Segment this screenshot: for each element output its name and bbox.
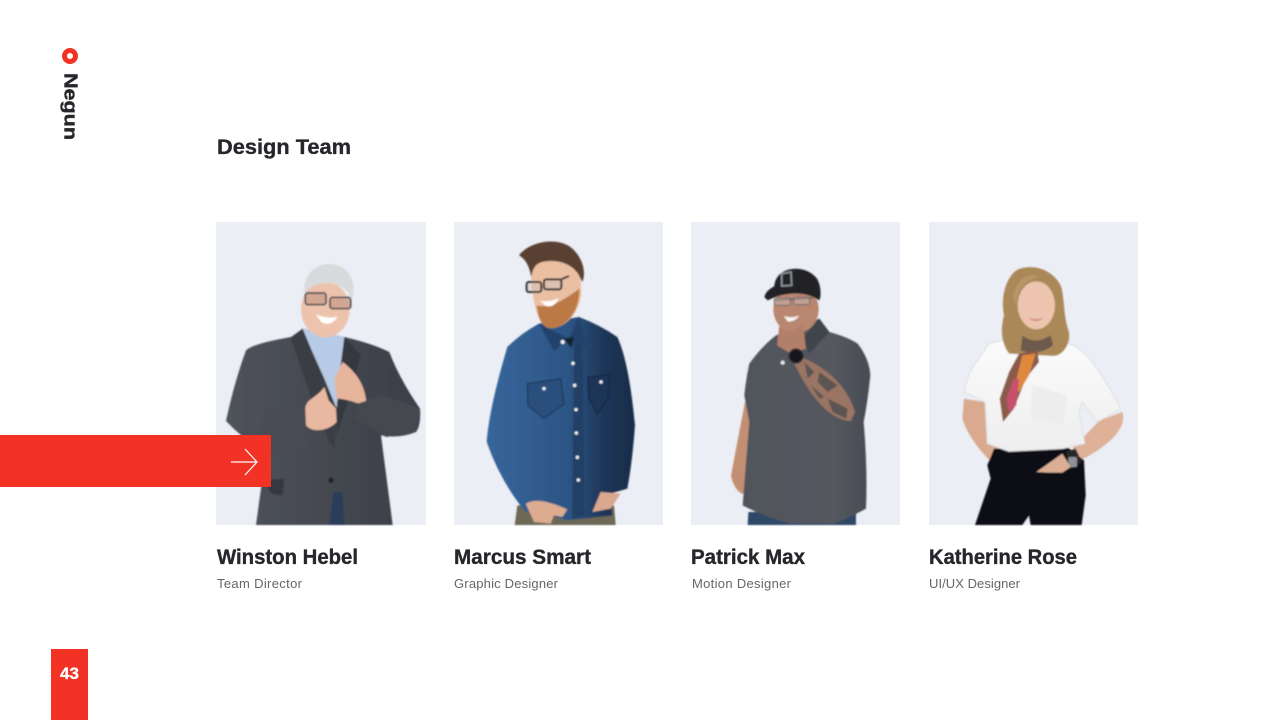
brand logo: Negun [60, 73, 82, 140]
member: Katherine Rose: Katherine Rose [929, 546, 1077, 569]
member: Patrick Max [691, 546, 805, 591]
member: Winston Hebel: Team Director [217, 576, 303, 591]
icon: arrow [231, 449, 257, 475]
page number [51, 649, 88, 720]
member: Winston Hebel: Winston Hebel [217, 546, 358, 569]
card: Marcus Smart [454, 222, 663, 525]
photo: Katherine Rose [962, 267, 1123, 525]
member: Marcus Smart [454, 546, 591, 591]
card: Patrick Max [691, 222, 900, 525]
member: Katherine Rose [929, 546, 1077, 591]
card: Winston Hebel [216, 222, 426, 525]
brand logo [60, 50, 82, 140]
member: Katherine Rose: UI/UX Designer [929, 576, 1021, 591]
member: Marcus Smart: Marcus Smart [454, 546, 591, 569]
member: Marcus Smart: Graphic Designer [454, 576, 559, 591]
member: Patrick Max: Motion Designer [692, 576, 792, 591]
photo: Winston Hebel [226, 264, 420, 525]
page number: 43 [60, 664, 79, 683]
arrow banner [0, 435, 271, 487]
photo: Marcus Smart [487, 241, 635, 525]
member: Patrick Max: Patrick Max [691, 546, 805, 569]
heading: Design Team [217, 136, 351, 159]
photo: Patrick Max [731, 269, 870, 525]
card: Katherine Rose [929, 222, 1138, 525]
member: Winston Hebel [217, 546, 358, 591]
